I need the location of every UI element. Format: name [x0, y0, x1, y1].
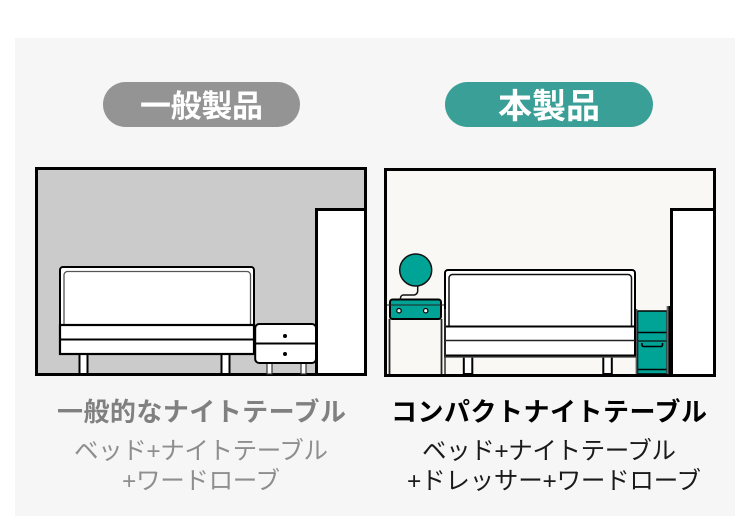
column: general product [36, 82, 366, 495]
badge: general product: 一般製品 [140, 89, 263, 124]
room illustration: general layout [36, 168, 366, 374]
nightstand [255, 324, 316, 374]
wardrobe [316, 210, 366, 374]
bed [60, 267, 254, 374]
text: compact furniture set [407, 437, 701, 495]
room wall [36, 168, 366, 374]
heading: compact nightstand: コンパクトナイトテーブル [391, 397, 707, 427]
badge: this product [445, 82, 653, 127]
mirror with cord [400, 254, 432, 300]
badge: this product: 本製品 [498, 88, 600, 126]
heading: general nightstand: 一般的なナイトテーブル [57, 397, 346, 427]
text: general furniture set: +ワードローブ [122, 467, 280, 495]
room illustration: compact layout [386, 170, 714, 376]
text: general furniture set [74, 437, 328, 495]
room wall [386, 170, 714, 376]
vanity desk [387, 300, 444, 374]
text: compact furniture set: ベッド+ナイトテーブル [422, 437, 676, 465]
dresser drawers [636, 306, 670, 374]
badge: general product [103, 82, 300, 127]
column: this product [386, 82, 714, 495]
bed [444, 270, 637, 374]
text: compact furniture set: +ドレッサー+ワードローブ [407, 467, 701, 495]
wardrobe [672, 210, 714, 376]
text: general furniture set: ベッド+ナイトテーブル [74, 437, 328, 465]
